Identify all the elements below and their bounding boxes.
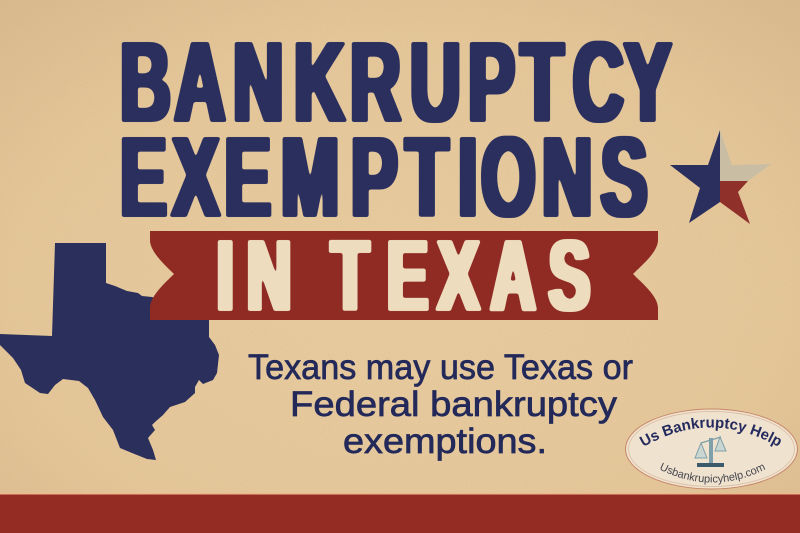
subtitle line 2: Federal bankruptcy <box>290 385 618 424</box>
title <box>120 19 671 240</box>
title line: exemptions: EXEMPTIONS <box>120 114 648 240</box>
badge: us bankruptcy help <box>625 408 798 490</box>
icon: texas star <box>670 130 771 224</box>
subtitle line 3: exemptions. <box>343 422 547 461</box>
subtitle text <box>248 348 633 461</box>
badge heading: Us Bankruptcy Help <box>639 418 781 447</box>
icon: scales of justice <box>695 437 726 467</box>
badge ellipse <box>626 409 798 489</box>
badge inner ring <box>628 412 794 486</box>
banner: in texas <box>150 220 658 332</box>
map: texas state silhouette <box>0 243 219 460</box>
title line: bankruptcy: BANKRUPTCY <box>120 19 671 145</box>
subtitle line 1: Texans may use Texas or <box>248 348 633 387</box>
ribbon shape <box>150 231 658 320</box>
footer band <box>0 493 800 533</box>
banner text: IN TEXAS <box>217 220 590 332</box>
badge url: Usbankrupicyhelp.com <box>660 462 766 485</box>
